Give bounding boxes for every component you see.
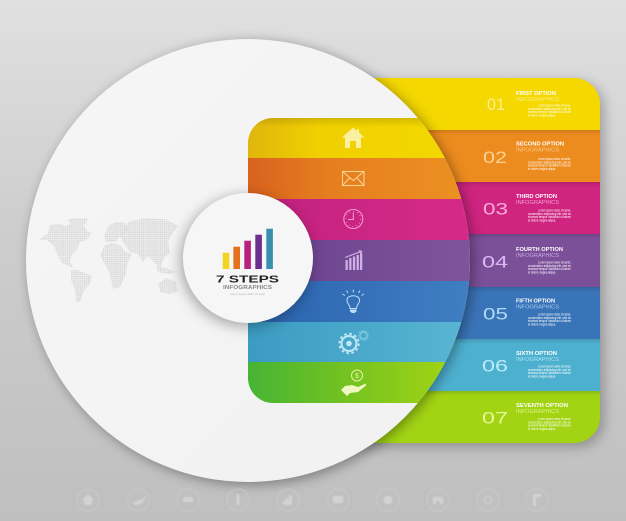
option 07: INFOGRAPHICS [516,409,560,415]
option 04: Lorem ipsum dolor sit amet, [538,260,571,264]
option 07: Lorem ipsum dolor sit amet, [538,417,571,421]
option 04: INFOGRAPHICS [516,253,560,259]
world map [38,218,178,302]
option 05: eiusmod tempor incididunt ut labore [528,319,571,323]
option 07: et dolore magna aliqua. [528,427,556,431]
option 05: 05 [483,304,508,324]
option 01: FIRST OPTION [516,91,556,97]
option 03: INFOGRAPHICS [516,200,560,206]
option 01: consectetur adipiscing elit, sed do [528,107,571,111]
option 06 [482,351,571,378]
icon: light bulb [342,290,364,313]
option 05: Lorem ipsum dolor sit amet, [538,312,571,316]
big circle shadow [29,42,473,484]
option 06: consectetur adipiscing elit, sed do [528,368,571,372]
bottom icon row [77,489,548,511]
panel: right option bands [361,76,610,453]
big white circle [26,39,470,482]
icon: growth chart [345,250,362,270]
option 01: 01 [487,95,505,114]
option 06: INFOGRAPHICS [516,357,560,363]
option 04: FOURTH OPTION [516,247,563,253]
option 07: 07 [482,408,508,428]
option 02 [483,142,571,171]
option 06: SIXTH OPTION [516,351,557,357]
option 03: 03 [483,200,508,218]
option 07: SEVENTH OPTION [516,403,568,409]
option 01 [487,91,571,117]
option 06: eiusmod tempor incididunt ut labore [528,371,571,375]
option 04: 04 [482,252,508,272]
option 04: eiusmod tempor incididunt ut labore [528,267,571,271]
option 04 [482,247,571,274]
option 02: INFOGRAPHICS [516,148,560,154]
option 02: consectetur adipiscing elit, sed do [528,160,571,164]
option 07 [482,403,571,431]
logo title: 7 STEPS [216,274,279,286]
option 03: eiusmod tempor incididunt ut labore [528,215,571,219]
icon: home [342,128,364,148]
icon: hand with coin [341,370,366,396]
option 05: consectetur adipiscing elit, sed do [528,316,571,320]
logo subtitle: INFOGRAPHICS [223,285,273,291]
option 03: consectetur adipiscing elit, sed do [528,212,571,216]
option 01: eiusmod tempor incididunt ut labore [528,110,571,114]
center circle [183,193,313,323]
icon: clock [344,210,363,228]
option 03: THIRD OPTION [516,194,557,200]
option 02: Lorem ipsum dolor sit amet, [538,157,571,161]
option 07: eiusmod tempor incididunt ut labore [528,424,571,428]
option 03: Lorem ipsum dolor sit amet, [538,208,571,212]
option 02: 02 [483,148,507,167]
option 02: SECOND OPTION [516,142,564,148]
center circle shadow [181,196,311,326]
option 03 [483,194,571,222]
icon: gears [339,331,368,353]
icon: mail [342,172,364,186]
option 06: Lorem ipsum dolor sit amet, [538,364,571,368]
logo tagline: Lorem ipsum dolor sit amet [230,292,265,296]
option 02: eiusmod tempor incididunt ut labore [528,164,571,168]
option 05 [483,299,571,326]
option 04: et dolore magna aliqua. [528,270,556,274]
option 07: consectetur adipiscing elit, sed do [528,420,571,424]
icon: hand with coin: $ [355,373,359,380]
option 01: Lorem ipsum dolor sit amet, [538,104,571,108]
option 05: FIFTH OPTION [516,299,555,305]
panel: inner icon bands [248,118,480,403]
option 04: consectetur adipiscing elit, sed do [528,264,571,268]
option 06: et dolore magna aliqua. [528,374,556,378]
option 06: 06 [482,356,508,376]
option 05: INFOGRAPHICS [516,305,560,311]
logo: bars [223,229,273,269]
option 01: INFOGRAPHICS [516,97,560,103]
option 02: et dolore magna aliqua. [528,167,556,171]
option 03: et dolore magna aliqua. [528,218,556,222]
option 01: et dolore magna aliqua. [528,113,556,117]
option 05: et dolore magna aliqua. [528,322,556,326]
